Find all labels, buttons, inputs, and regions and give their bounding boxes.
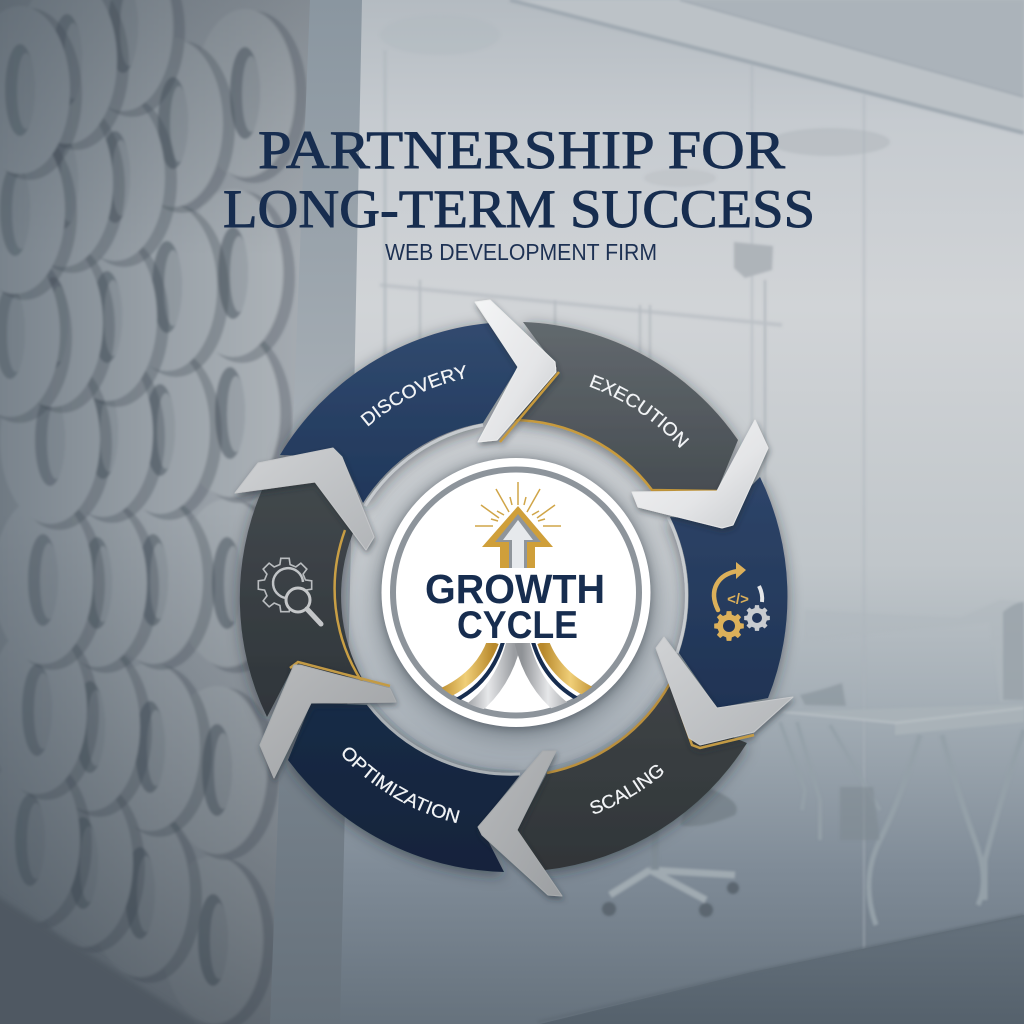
segment: scaling: SCALING xyxy=(590,764,664,814)
word: cycle: CYCLE xyxy=(457,604,578,647)
segment: scaling xyxy=(518,682,752,880)
icon: code and gears xyxy=(714,562,770,641)
icon: rising arrow with rays xyxy=(475,482,561,568)
icon: rising paths xyxy=(442,643,592,709)
segment: optimization xyxy=(284,703,522,883)
subtitle: WEB DEVELOPMENT FIRM xyxy=(385,239,657,265)
label backing xyxy=(420,569,612,643)
chevron: upper left xyxy=(235,448,374,550)
badge disc xyxy=(382,458,650,727)
word: growth: GROWTH xyxy=(425,566,605,612)
glass column xyxy=(270,0,362,1024)
office furniture: table, chair, monitor xyxy=(602,600,1024,925)
centre badge xyxy=(382,458,650,727)
inner halo behind centre badge xyxy=(340,422,688,770)
wall texture panel xyxy=(0,0,312,1024)
floor xyxy=(540,915,1024,1024)
segment: development icon band xyxy=(668,477,787,708)
chevron: top xyxy=(475,300,559,442)
segment: execution xyxy=(473,300,778,532)
title line 1: PARTNERSHIP FOR xyxy=(258,120,785,180)
segment: research icon band xyxy=(240,482,363,717)
segment: discovery: DISCOVERY xyxy=(360,365,466,426)
chevron: right xyxy=(632,420,768,528)
title line 2: LONG-TERM SUCCESS xyxy=(223,179,815,239)
badge ring xyxy=(393,470,639,716)
segment: discovery xyxy=(255,300,536,546)
icon: code and gears: </> xyxy=(727,591,749,608)
chevron: bottom xyxy=(478,751,562,896)
segment: optimization: OPTIMIZATION xyxy=(342,748,460,824)
wall floor wedge xyxy=(0,885,225,1024)
title xyxy=(223,120,815,239)
badge label xyxy=(420,566,612,647)
cycle ring xyxy=(231,316,797,883)
ceiling beams and glass partition lines xyxy=(380,0,1024,1000)
arrow chevrons xyxy=(235,300,793,896)
chevron: lower right xyxy=(656,637,793,748)
segment: execution: EXECUTION xyxy=(590,374,690,448)
icon: gear and magnifier xyxy=(258,558,321,624)
embossed rings xyxy=(0,0,307,1024)
chevron: lower left xyxy=(260,662,396,778)
